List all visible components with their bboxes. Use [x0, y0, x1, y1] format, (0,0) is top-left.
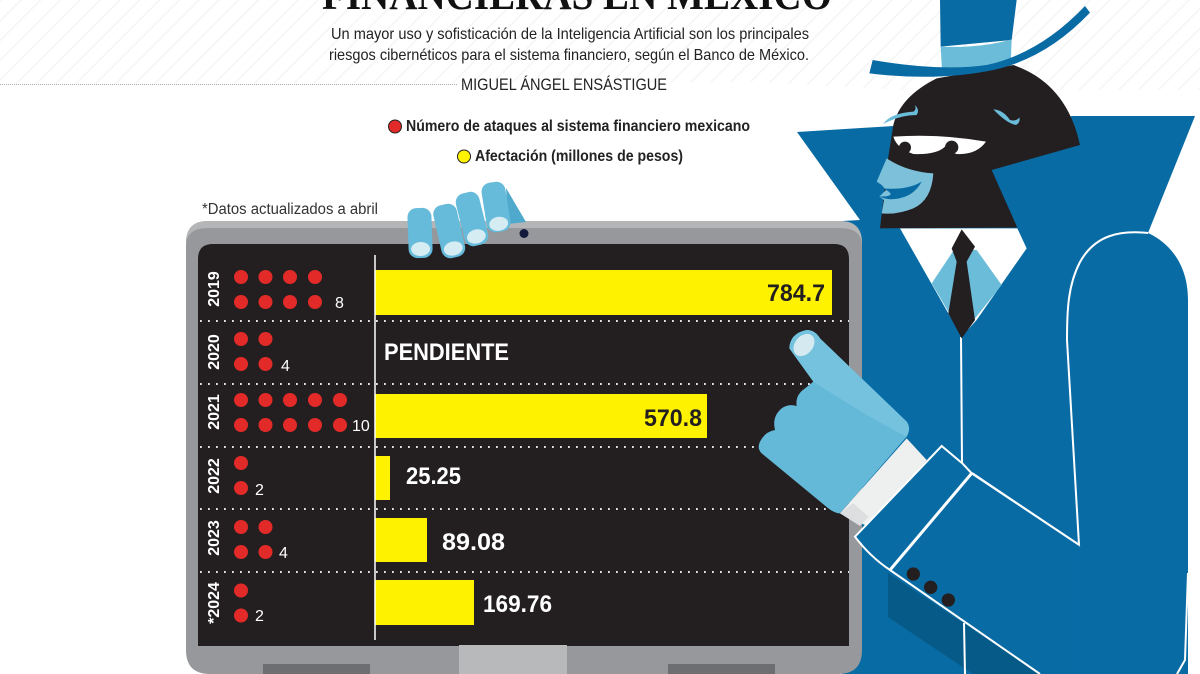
row 2022: 2022	[206, 458, 223, 494]
row 2024	[206, 580, 552, 625]
face	[877, 105, 1020, 214]
row 2024: 169.76	[483, 591, 552, 618]
legend	[388, 118, 750, 165]
row 2019: 8	[335, 295, 344, 312]
chart axis	[374, 255, 376, 640]
row 2020: 2020	[206, 334, 223, 370]
subtitle	[329, 26, 809, 64]
shirt cuff	[840, 438, 927, 527]
legend: Afectación (millones de pesos)	[475, 148, 683, 165]
legend: Número de ataques al sistema financiero mexicano	[406, 118, 750, 135]
row 2023: 2023	[206, 520, 223, 556]
row 2021: 2021	[206, 394, 223, 430]
subtitle: Un mayor uso y sofisticación de la Inteligencia Artificial son los principales	[331, 26, 809, 43]
hat	[869, 0, 1090, 77]
shirt and tie	[900, 228, 1027, 338]
icon: fingers gripping the monitor	[407, 180, 526, 260]
row 2022	[206, 456, 461, 500]
row 2019	[206, 270, 832, 315]
row 2023: 4	[279, 545, 288, 562]
footnote: *Datos actualizados a abril	[202, 201, 378, 218]
row 2023	[206, 518, 505, 562]
sleeve	[855, 446, 1079, 674]
head	[880, 65, 1080, 228]
row 2021: 10	[352, 418, 370, 435]
row 2022: 25.25	[406, 463, 461, 490]
author byline: MIGUEL ÁNGEL ENSÁSTIGUE	[461, 75, 667, 94]
figure: head and hat	[869, 0, 1090, 338]
row 2023: 89.08	[442, 529, 505, 556]
monitor	[186, 221, 862, 674]
icon: pointing hand and sleeve	[759, 330, 1079, 674]
row 2022: 2	[255, 482, 264, 499]
row 2019: 784.7	[767, 280, 825, 307]
row 2021: 570.8	[644, 405, 702, 432]
row 2024: 2	[255, 608, 264, 625]
figure: suit body	[797, 116, 1195, 674]
row 2020: PENDIENTE	[384, 339, 509, 366]
subtitle: riesgos cibernéticos para el sistema financiero, según el Banco de México.	[329, 47, 809, 64]
row 2024: *2024	[206, 582, 223, 624]
row 2021	[206, 393, 707, 438]
row 2019: 2019	[206, 271, 223, 307]
chart: row dividers	[200, 321, 849, 572]
hand	[759, 330, 909, 513]
row 2020: 4	[281, 358, 290, 375]
row 2020	[206, 332, 509, 375]
